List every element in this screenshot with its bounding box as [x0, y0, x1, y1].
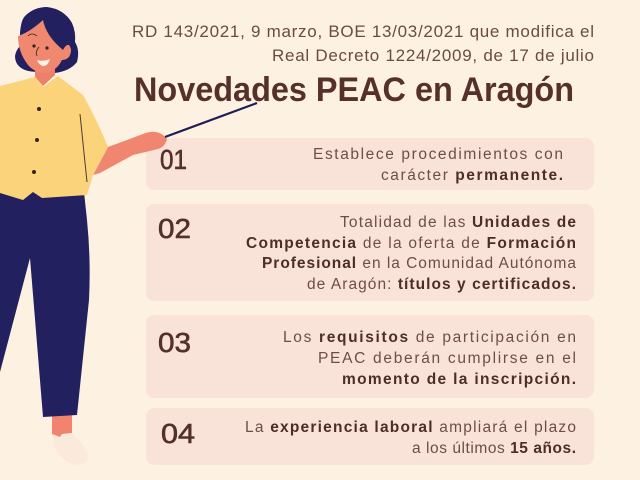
text block 01: [313, 146, 563, 184]
panel: 03: [146, 315, 594, 398]
text block 02: [246, 214, 576, 293]
illustration: teacher with pointer: [0, 7, 257, 465]
text block 04: La experiencia laboral ampliará el plazo: [245, 419, 576, 436]
number 04: 04: [161, 418, 195, 449]
title: Novedades PEAC en Aragón: [134, 71, 574, 109]
number 01: 01: [160, 144, 187, 175]
shoe: [52, 433, 88, 465]
subtitle: legal reference: RD 143/2021, 9 marzo, BOE 13/03/2021 que modifica el: [132, 22, 594, 41]
text block 03: PEAC deberán cumplirse en el: [318, 350, 576, 367]
subtitle: legal reference: [132, 22, 594, 65]
face: [18, 20, 71, 73]
number 03: 03: [158, 327, 191, 358]
text block 01: Establece procedimientos con: [313, 146, 563, 163]
trousers: [0, 192, 90, 417]
pointer: [165, 103, 257, 137]
panel: 02: [146, 204, 594, 301]
text block 02: Profesional en la Comunidad Autónoma: [262, 255, 576, 272]
smile: [37, 59, 50, 66]
text block 02: Competencia de la oferta de Formación: [246, 235, 576, 252]
text block 04: [245, 419, 576, 457]
panel: 01: [146, 138, 594, 190]
panel: 04: [146, 408, 594, 465]
text block 03: [283, 329, 576, 388]
text block 02: Totalidad de las Unidades de: [340, 214, 576, 231]
shirt buttons: [32, 107, 41, 174]
number 02: 02: [158, 213, 191, 244]
ankle: [52, 415, 72, 437]
neck: [35, 68, 55, 86]
text block 01: carácter permanente.: [381, 167, 563, 184]
text block 02: de Aragón: títulos y certificados.: [307, 276, 576, 293]
hair back: [15, 7, 78, 73]
shirt: [0, 76, 108, 200]
text block 04: a los últimos 15 años.: [412, 440, 576, 457]
arm: [93, 132, 167, 175]
sleeve fold: [80, 114, 87, 182]
subtitle: legal reference: Real Decreto 1224/2009, de 17 de julio: [272, 46, 594, 65]
eyes and brow: [28, 34, 49, 56]
text block 03: Los requisitos de participación en: [283, 329, 576, 346]
text block 03: momento de la inscripción.: [342, 371, 576, 388]
